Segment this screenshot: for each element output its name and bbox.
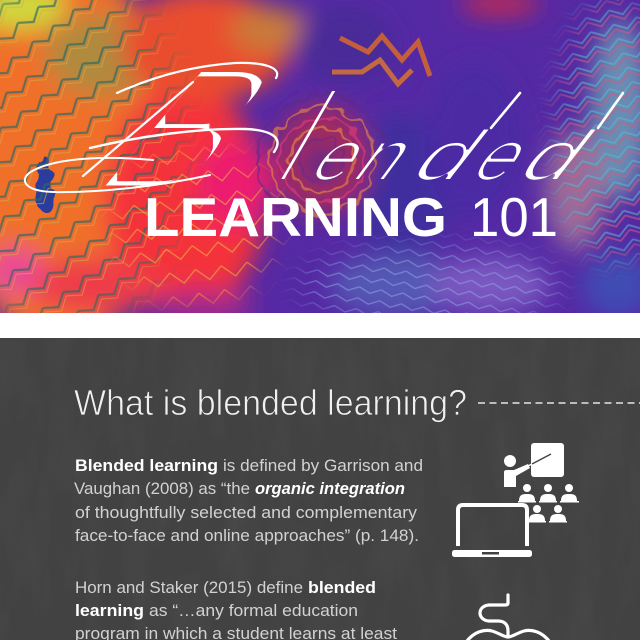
- text block: Garrison and Vaughan definition: organic integration: [255, 479, 405, 498]
- text block: Garrison and Vaughan definition: face-to-face and online approaches” (p. 148).: [75, 526, 419, 545]
- icon: teacher at board with students: [504, 443, 579, 522]
- title: LEARNING 101: 101: [470, 186, 558, 248]
- text block: Horn and Staker definition: as “…any formal education: [149, 601, 358, 620]
- icon: laptop: [452, 505, 532, 557]
- lowercase lended: l: [265, 68, 348, 207]
- text block: Garrison and Vaughan definition: of thoughtfully selected and complementary: [75, 503, 418, 522]
- lowercase lended: e: [462, 116, 543, 196]
- text block: Garrison and Vaughan definition: Blended learning: [75, 456, 218, 475]
- lowercase lended: n: [344, 117, 427, 196]
- title: LEARNING 101: [148, 198, 556, 236]
- lowercase lended: d: [402, 117, 498, 196]
- heading: What is blended learning?: What is blended learning?: [74, 382, 467, 423]
- text block: Horn and Staker definition: Horn and Staker (2015) define: [75, 578, 303, 597]
- zigzag ripple rings: [258, 96, 386, 224]
- text block: Garrison and Vaughan definition: is defined by Garrison and: [223, 456, 423, 475]
- text block: Garrison and Vaughan definition: [74, 456, 423, 545]
- zigzag texture bands: [0, 0, 640, 313]
- panel: chalkboard: [0, 338, 640, 640]
- hero background swirl: [0, 0, 640, 340]
- hero banner: [0, 0, 640, 340]
- capital B: B: [63, 29, 311, 228]
- lowercase lended: d: [509, 117, 605, 196]
- text block: Horn and Staker definition: learning: [75, 601, 144, 620]
- swash strokes of the capital: [25, 63, 277, 192]
- icon: apple: [467, 595, 549, 640]
- text block: Garrison and Vaughan definition: Vaughan (2008) as “the: [74, 479, 250, 498]
- script title: Blended: [24, 62, 624, 194]
- text block: Horn and Staker definition: [75, 578, 397, 640]
- title: LEARNING 101: LEARNING: [144, 186, 447, 248]
- text block: Horn and Staker definition: blended: [308, 578, 376, 597]
- ascender flourishes: [491, 93, 623, 128]
- lowercase lended: e: [300, 116, 381, 196]
- lowercase lended: [281, 91, 596, 180]
